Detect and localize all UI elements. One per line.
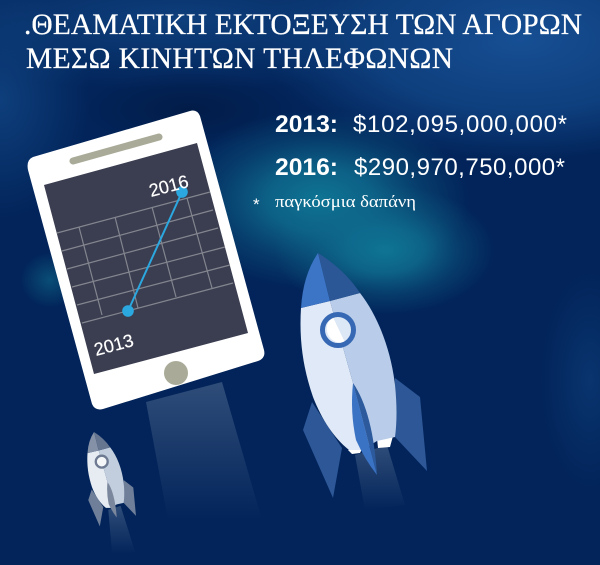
phone [28,111,264,409]
exhaust [355,445,405,510]
spending figures: $290,970,750,000* [354,154,565,181]
trend line [122,186,188,317]
nose [87,432,99,453]
spending figures [275,111,567,181]
spending figures: 2016: [275,154,338,181]
large rocket [300,253,427,510]
year labels: 2016 [147,171,191,201]
footnote: * [253,195,260,214]
year labels: 2013 [92,330,136,360]
screen [44,143,248,374]
home button [164,361,188,385]
body [300,301,362,450]
year labels [92,171,191,360]
nose [301,253,330,308]
title: ΜΕΣΩ ΚΙΝΗΤΩΝ ΤΗΛΕΦΩΝΩΝ [26,43,453,75]
phone body [28,111,264,409]
speaker [73,137,159,161]
center fin [352,383,377,475]
footnote: παγκόσμια δαπάνη [275,192,416,211]
body [87,450,111,508]
footnote [253,192,416,214]
spending figures: 2013: [275,111,338,138]
porthole [96,456,108,468]
title [24,9,582,75]
porthole [322,314,354,346]
small rocket [87,432,136,554]
fins [88,480,136,526]
spending figures: $102,095,000,000* [353,111,567,138]
beam under phone [146,382,262,520]
fins [303,378,427,498]
nozzles [348,436,393,454]
center fin [107,482,117,517]
exhaust [108,506,135,554]
chart grid [57,192,233,323]
title: .ΘΕΑΜΑΤΙΚΗ ΕΚΤΟΞΕΥΣΗ ΤΩΝ ΑΓΟΡΩΝ [24,9,582,41]
